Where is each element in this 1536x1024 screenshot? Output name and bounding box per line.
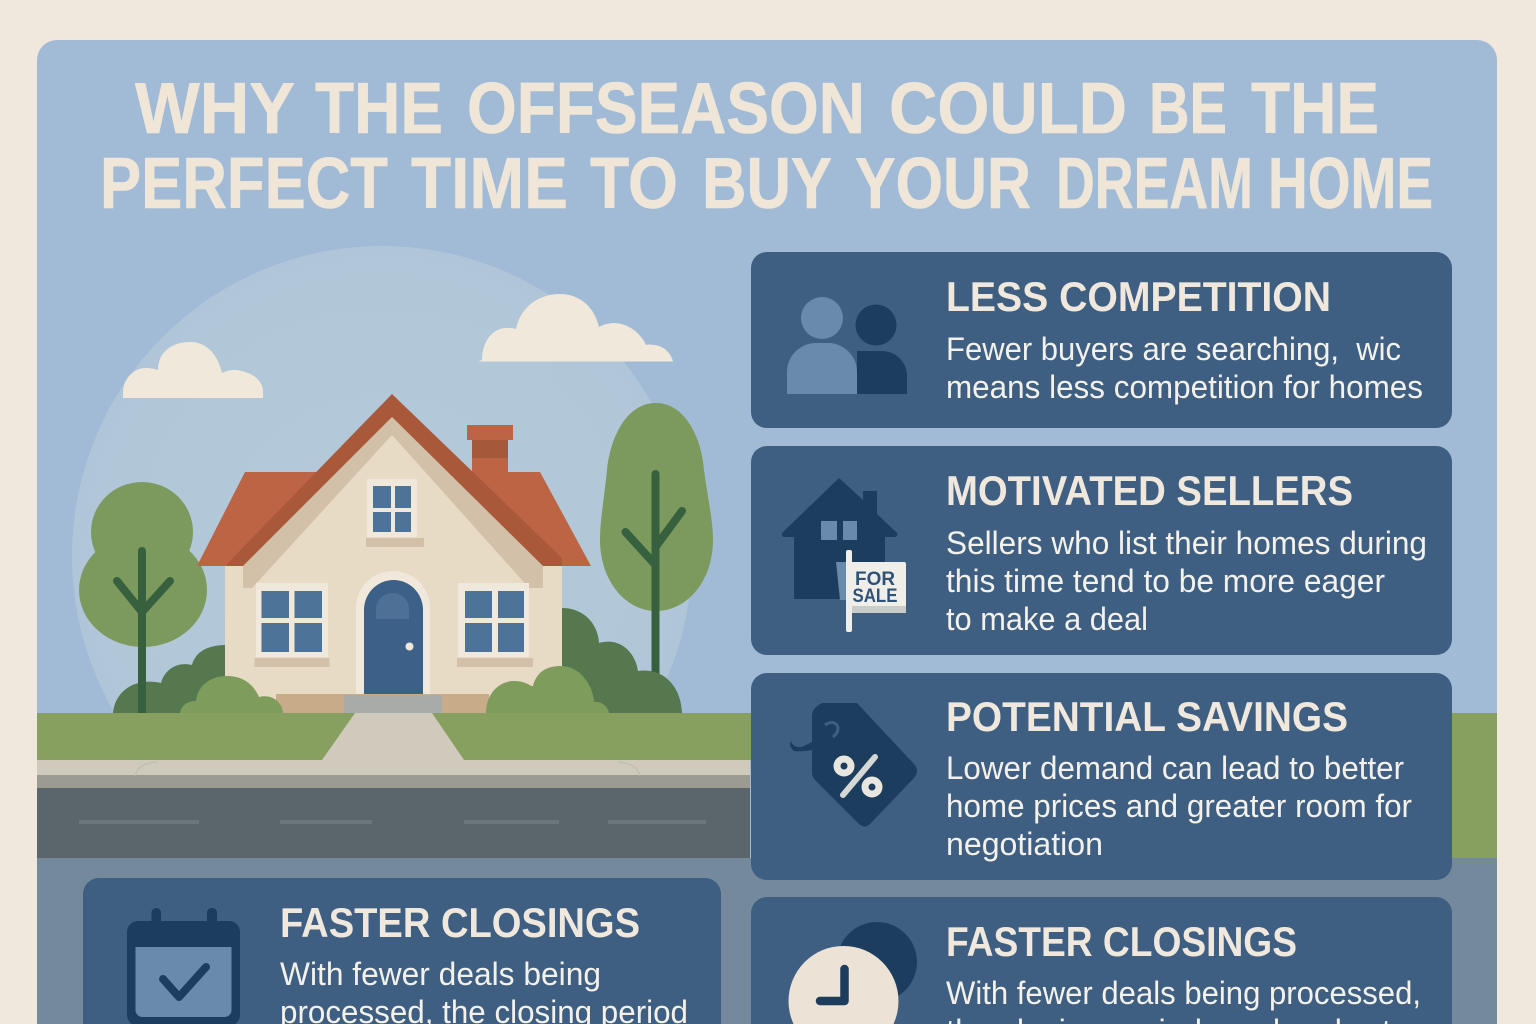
title: YOUR: [855, 144, 1031, 224]
right window: [457, 583, 533, 667]
body text: Fewer buyers are searching, wic: [946, 331, 1401, 367]
body text: to make a deal: [946, 601, 1148, 637]
title: WHY: [135, 69, 295, 149]
title: PERFECT: [100, 144, 388, 224]
title: BUY: [702, 144, 832, 224]
gable shadow: [243, 417, 543, 588]
title: TO: [590, 144, 678, 224]
title: THE: [315, 69, 443, 149]
card: faster closings left: [83, 878, 721, 1024]
card: potential savings: [751, 673, 1452, 880]
body text: Lower demand can lead to better: [946, 750, 1404, 786]
icon: house with for sale sign: [782, 478, 906, 632]
title: TIME: [411, 144, 568, 224]
light shrubs: [180, 666, 609, 713]
heading: LESS COMPETITION: [946, 273, 1331, 320]
house: [197, 394, 591, 713]
title: OFFSEASON: [467, 69, 865, 149]
title: COULD: [889, 69, 1127, 149]
title: THE: [1251, 69, 1379, 149]
dark shrubs: [113, 608, 682, 713]
gable roof: [225, 394, 562, 566]
icon: calendar with check: [127, 908, 240, 1024]
body text: negotiation: [946, 826, 1103, 862]
tree right: [600, 403, 713, 680]
cloud right: [478, 294, 673, 362]
icon: house with for sale sign: SALE: [852, 586, 898, 607]
body text: [280, 956, 688, 1024]
card: faster closings right: [751, 897, 1452, 1024]
pale sky circle: [72, 246, 689, 710]
front walkway: [322, 713, 464, 760]
body text: With fewer deals being: [280, 956, 601, 992]
body text: With fewer deals being processed,: [946, 975, 1421, 1011]
ground and road strip: [37, 713, 1497, 1024]
heading: MOTIVATED SELLERS: [946, 467, 1353, 514]
body text: [946, 331, 1423, 405]
house wall: [225, 400, 562, 713]
heading: FASTER CLOSINGS: [946, 918, 1297, 965]
body text: this time tend to be more eager: [946, 563, 1385, 599]
left window: [254, 583, 330, 667]
card: motivated sellers: [751, 446, 1452, 655]
front door: [356, 571, 430, 695]
cloud left: [123, 342, 263, 398]
heading: POTENTIAL SAVINGS: [946, 693, 1348, 740]
card: less competition: [751, 252, 1452, 428]
upper window: [366, 479, 424, 547]
icon: two people: [787, 297, 907, 394]
body text: Sellers who list their homes during: [946, 525, 1427, 561]
icon: clock: [788, 922, 917, 1024]
tree left: [79, 482, 207, 680]
icon: price tag with percent: [790, 703, 917, 826]
title: HOME: [1268, 144, 1433, 224]
title: BE: [1149, 69, 1227, 149]
body text: [946, 525, 1427, 637]
title: [100, 69, 1433, 224]
body text: means less competition for homes: [946, 369, 1423, 405]
heading: FASTER CLOSINGS: [280, 899, 640, 946]
body text: home prices and greater room for: [946, 788, 1412, 824]
chimney: [467, 425, 513, 498]
foundation and step: [276, 694, 489, 713]
title: DREAM: [1056, 144, 1253, 224]
back roof: [197, 472, 591, 566]
icon: house with for sale sign: FOR: [855, 569, 895, 590]
left trunk over shrub: [138, 680, 146, 713]
body text: [946, 750, 1412, 862]
